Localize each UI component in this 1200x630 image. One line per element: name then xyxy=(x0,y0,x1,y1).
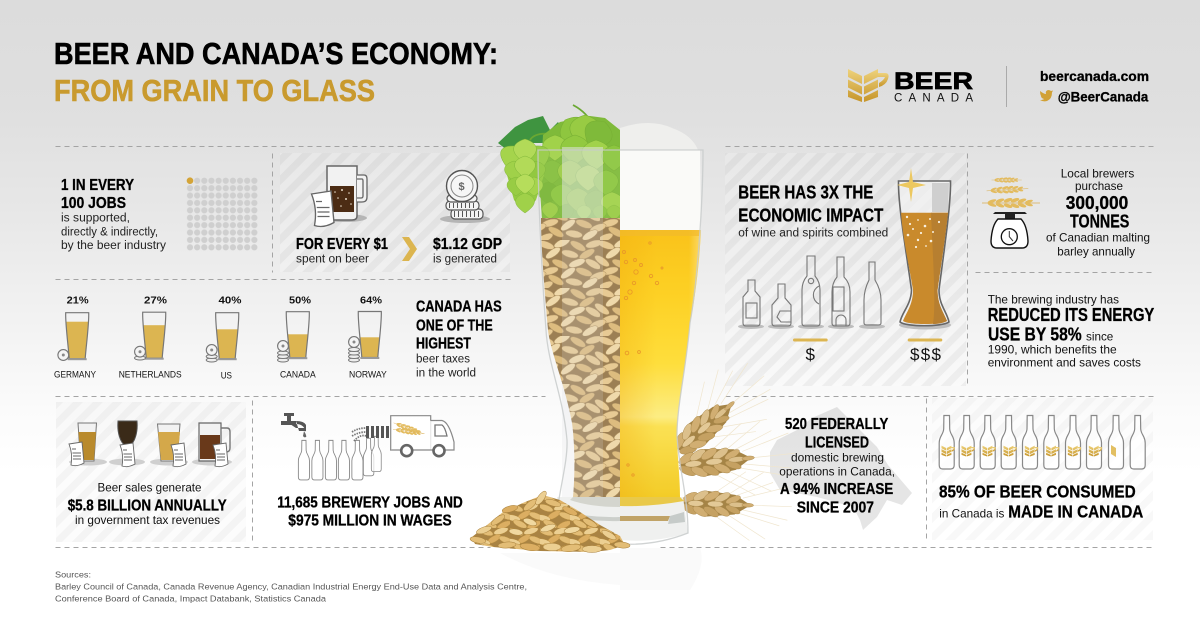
logo: Beer Canada: CANADA xyxy=(894,93,973,105)
hop petals: centre xyxy=(538,111,626,220)
panel: barley purchase xyxy=(982,167,1150,259)
panel: federally licensed breweries: operations in Canada, xyxy=(779,465,895,479)
panel: federally licensed breweries: A 94% INCREASE xyxy=(780,481,894,498)
glass: Netherlands 27%: 27% xyxy=(144,295,167,306)
beer foam xyxy=(620,123,698,150)
title: BEER AND CANADA’S ECONOMY: xyxy=(54,36,498,71)
beer taxes text xyxy=(416,298,502,380)
glass: Germany 21%: GERMANY xyxy=(54,370,97,381)
icon: four beers with bills xyxy=(69,421,232,467)
hop cone: left xyxy=(497,139,553,213)
map of Canada xyxy=(770,407,912,530)
icon: coin stack: $ xyxy=(458,181,465,193)
section dividers xyxy=(56,146,1154,548)
heading: beer has 3x: of wine and spirits combined xyxy=(738,228,888,240)
comparison bar: bottles xyxy=(793,338,828,364)
panel: 3x economic impact xyxy=(738,168,951,364)
jobs and wages text xyxy=(277,495,463,530)
tax revenue text: Beer sales generate xyxy=(98,481,202,495)
icon: beer glass with sparkle xyxy=(897,168,951,330)
panel: energy reduction: environment and saves costs xyxy=(988,356,1141,370)
panel: energy reduction: REDUCED ITS ENERGY xyxy=(988,305,1154,325)
glass: US 40%: US xyxy=(221,370,232,382)
heading: beer has 3x: BEER HAS 3X THE xyxy=(738,183,873,203)
beer taxes text: in the world xyxy=(416,368,476,380)
hop leaf xyxy=(498,116,566,153)
beer bubbles xyxy=(622,242,663,476)
tax revenue text xyxy=(68,481,227,527)
glass: Canada 50% xyxy=(278,295,316,381)
tax revenue text: in government tax revenues xyxy=(75,513,220,527)
hop mass xyxy=(540,116,620,220)
heading: beer has 3x: ECONOMIC IMPACT xyxy=(738,206,883,226)
for every $1 text: spent on beer xyxy=(296,254,369,266)
panel: government tax revenues xyxy=(68,421,232,527)
glass: Norway 64% xyxy=(348,295,387,381)
beer taxes text: beer taxes xyxy=(416,354,470,366)
panel: federally licensed breweries xyxy=(779,416,895,517)
panel: energy reduction: The brewing industry has xyxy=(988,292,1119,306)
jobs and wages text: 11,685 BREWERY JOBS AND xyxy=(277,495,463,512)
glass: Norway 64%: NORWAY xyxy=(349,370,387,381)
jobs text: by the beer industry xyxy=(61,240,166,252)
striped panel: $1 to GDP xyxy=(280,153,510,272)
barley text: Local brewers xyxy=(1061,167,1134,181)
glass: Germany 21% xyxy=(54,295,97,381)
icon: wine and spirit bottles xyxy=(738,256,885,329)
panel: energy reduction xyxy=(988,292,1154,370)
comparison bar: bottles: $ xyxy=(806,345,816,364)
icon: tap, bottling line and truck xyxy=(281,413,454,480)
jobs text: 100 JOBS xyxy=(61,195,126,212)
glass interior highlight over hops xyxy=(562,147,603,219)
barley text: 300,000 xyxy=(1066,193,1128,213)
beer taxes text: ONE OF THE xyxy=(416,318,493,335)
GDP text: is generated xyxy=(433,254,497,266)
jobs text xyxy=(61,177,166,252)
glass: Germany 21%: 21% xyxy=(67,295,89,306)
central glass: half barley, half beer xyxy=(470,105,703,553)
jobs text: directly & indirectly, xyxy=(61,227,158,239)
icon: ten bottles, 85% filled with logo xyxy=(939,416,1145,469)
panel: energy reduction: 1990, which benefits the xyxy=(988,342,1117,356)
panel: energy reduction: USE BY 58% xyxy=(988,325,1082,345)
jobs text: is supported, xyxy=(61,213,130,225)
sources: Conference Board of Canada, Impact Databank, Statistics Canada xyxy=(55,593,326,603)
barley fill xyxy=(541,218,620,497)
glass: US 40% xyxy=(206,295,242,382)
GDP text xyxy=(433,236,502,266)
beer taxes text: HIGHEST xyxy=(416,336,471,353)
beer liquid xyxy=(620,230,701,497)
jobs text: 1 IN EVERY xyxy=(61,177,135,194)
title xyxy=(54,36,498,108)
icon: coin stack xyxy=(440,170,490,223)
sources: Sources: xyxy=(55,570,91,580)
comparison bar: beer: $$$ xyxy=(910,345,942,364)
heading: beer has 3x xyxy=(738,183,888,240)
made in Canada text: MADE IN CANADA xyxy=(1008,502,1144,522)
tax revenue text: $5.8 BILLION ANNUALLY xyxy=(68,498,227,515)
sources xyxy=(55,570,527,603)
panel: federally licensed breweries: 520 FEDERALLY xyxy=(785,416,889,433)
barley text: purchase xyxy=(1075,179,1123,193)
panel: energy reduction: since xyxy=(1086,330,1114,344)
wheat stalks xyxy=(654,350,799,542)
panel: 1 in every 100 jobs xyxy=(61,177,258,252)
comparison bar: beer xyxy=(908,338,942,364)
barley pale band xyxy=(562,218,603,497)
for every $1 text: FOR EVERY $1 xyxy=(296,236,388,253)
logo: Beer Canada: BEER xyxy=(894,68,973,95)
barley text xyxy=(1046,167,1150,259)
barley text: barley annually xyxy=(1057,245,1135,259)
contact: web and twitter: beercanada.com xyxy=(1040,68,1149,84)
logo: Beer Canada xyxy=(848,68,973,105)
for every $1 text xyxy=(296,236,388,266)
made in Canada text: 85% OF BEER CONSUMED xyxy=(939,481,1136,501)
made in Canada text: in Canada is xyxy=(939,507,1004,521)
panel: federally licensed breweries: LICENSED xyxy=(805,435,869,452)
panel: federally licensed breweries: domestic brewing xyxy=(791,451,884,465)
title: FROM GRAIN TO GLASS xyxy=(54,73,375,108)
glass reflection xyxy=(500,548,702,590)
striped panel: economic impact xyxy=(725,153,966,386)
glass: US 40%: 40% xyxy=(218,295,242,306)
hop stem xyxy=(530,105,593,140)
panel: for every $1, $1.12 GDP xyxy=(296,166,502,266)
beer taxes text: CANADA HAS xyxy=(416,298,502,315)
barley text: of Canadian malting xyxy=(1046,231,1150,245)
icon: scale with barley xyxy=(982,177,1040,248)
hops xyxy=(497,105,626,220)
dot grid: 1 of 100 xyxy=(186,177,258,251)
icon: beer mug with bill xyxy=(312,166,367,226)
panel: brewery jobs and wages xyxy=(277,413,463,530)
contact: web and twitter: @BeerCanada xyxy=(1058,89,1148,105)
barley pile xyxy=(470,490,630,553)
glass outline xyxy=(538,150,703,544)
panel: federally licensed breweries: SINCE 2007 xyxy=(797,500,874,517)
sources: Barley Council of Canada, Canada Revenue Agency, Canadian Industrial Energy End-Use Data and Analysis Centre, xyxy=(55,581,527,591)
glass: Netherlands 27%: NETHERLANDS xyxy=(119,370,182,381)
GDP text: $1.12 GDP xyxy=(433,236,502,253)
jobs and wages text: $975 MILLION IN WAGES xyxy=(288,513,452,530)
arrow xyxy=(402,237,417,261)
panel: beer tax comparison xyxy=(54,295,502,382)
glass base xyxy=(555,497,688,541)
glass: Canada 50%: CANADA xyxy=(280,370,316,381)
made in Canada text xyxy=(939,481,1144,522)
glass: Netherlands 27% xyxy=(119,295,182,381)
barley text: TONNES xyxy=(1070,211,1129,231)
striped panel: tax revenues xyxy=(56,402,246,542)
contact: web and twitter xyxy=(1006,66,1149,107)
panel: made in Canada xyxy=(939,416,1145,522)
striped panel: made in Canada xyxy=(932,398,1153,540)
glass: Norway 64%: 64% xyxy=(360,295,382,306)
glass: Canada 50%: 50% xyxy=(289,295,311,306)
